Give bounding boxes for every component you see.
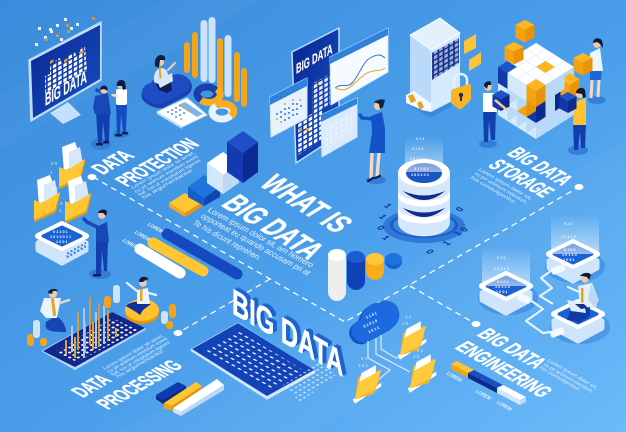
data processing text: fuit. Ius ut voluptatum ligeres <box>110 340 172 377</box>
legend bars with labels <box>121 223 237 274</box>
engineering labels: LOREM <box>474 390 492 401</box>
floating orange cubes <box>504 20 534 64</box>
legend bars with labels: LOREM <box>121 239 139 250</box>
server rack <box>405 18 464 118</box>
cloud seat with woman and laptop <box>141 55 192 108</box>
data tile: 1 0 0 1 <box>56 240 68 244</box>
small cylinders <box>27 285 176 346</box>
database cylinder <box>383 137 465 243</box>
server tiles with cables: 1 0 1 1 0 <box>562 253 577 257</box>
data tile <box>38 224 86 263</box>
folders: 0 1 <box>361 356 368 361</box>
cylinder chart <box>328 249 402 301</box>
big data 3d lettering: BIG DATA <box>234 279 345 384</box>
heading: big data engineering: BIG DATA <box>472 325 553 372</box>
engineering labels <box>445 372 513 412</box>
person: seated man with laptop <box>567 273 599 323</box>
engineering labels: LOREM <box>495 401 513 412</box>
folders with documents <box>34 142 91 223</box>
person: man placing cube <box>479 81 510 148</box>
heading: big data engineering: ENGINEERING <box>450 338 558 400</box>
connector end dots <box>88 174 584 336</box>
description text: Te his dicunt reprehen. <box>191 218 265 262</box>
storage text: his consulgentur. <box>469 176 518 205</box>
data tile: 1 0 1 0 0 1 1 <box>50 235 71 239</box>
cube stack <box>498 43 580 139</box>
padlock icon <box>451 74 471 110</box>
server tiles with cables: 1 0 0 1 <box>496 290 508 294</box>
cloud with binary: 0 1 0 1 0 <box>363 319 378 329</box>
server tiles with cables: 1 0 1 1 0 <box>561 235 576 239</box>
server tiles with cables <box>478 214 610 344</box>
folders with documents: 1 <box>59 208 62 213</box>
folders with documents: 0 0 <box>51 161 58 166</box>
database cylinder: 1 0 1 1 0 1 <box>410 157 428 161</box>
person: woman on orange disc <box>125 277 159 324</box>
folders <box>353 314 436 404</box>
storage heading: big data storage <box>483 144 579 200</box>
heading: data processing: DATA <box>66 371 117 400</box>
server tiles with cables: 0 1 0 <box>564 222 572 226</box>
storage text: Lorem ipsum dolor sit, <box>477 168 533 201</box>
heading: data processing <box>66 357 188 412</box>
yellow tiles <box>464 34 481 71</box>
person: man with folders <box>84 209 111 279</box>
heading: data protection: DATA <box>86 147 140 177</box>
data tile: 0 1 1 0 1 <box>53 230 68 234</box>
legend bars with labels: LOREM <box>146 223 164 234</box>
description text: Lorem ipsum dolor sit, am homero <box>206 205 317 269</box>
dashed connector lines <box>93 177 579 333</box>
heading: big data engineering <box>450 325 558 400</box>
step bars chart <box>169 131 258 217</box>
server tiles with cables: 0 1 0 1 <box>497 280 509 284</box>
person: kneeling man <box>40 289 69 332</box>
engineering text: his consulgentur. <box>538 366 582 392</box>
cloud with binary <box>349 301 399 344</box>
data processing text: cu pri animum interdum everti <box>106 337 170 374</box>
person: man in navy suit <box>91 86 111 150</box>
heading: data protection <box>86 135 204 189</box>
binary tablet <box>192 323 336 402</box>
cloud with binary: 1 1 0 1 <box>365 311 378 320</box>
data protection text: fuit. Ius ut voluptatum ligeres <box>137 158 203 197</box>
data protection text: his argumentantur. <box>141 168 196 200</box>
panel: big data dashboard: BIG DATA <box>296 40 333 77</box>
big data 3d lettering <box>232 278 347 385</box>
server tiles with cables: 1 0 1 1 0 <box>494 267 509 271</box>
monitor with big data histogram: BIG DATA <box>45 66 87 110</box>
folders: 0 1 <box>417 348 424 353</box>
binary digits around database: 0 <box>423 248 436 255</box>
binary digits around database: 1 0 <box>451 226 471 237</box>
engineering text: Lorem ipsum dolor sit, <box>546 359 599 390</box>
person: woman holding orange cube <box>574 38 606 104</box>
engineering text: cu pri animum interdum, <box>542 363 595 394</box>
engineering labels: LOREM <box>445 372 463 383</box>
description text: opporteat eu quando accusam pri at <box>199 211 313 277</box>
person: woman in blue dress <box>360 99 386 184</box>
folders: 1 0 1 <box>358 363 369 368</box>
binary digits around database <box>374 202 471 255</box>
database cylinder: 0 1 0 1 <box>412 147 424 151</box>
data protection text: cu pri animum interdum everti <box>133 155 200 194</box>
binary digits around database: 1 <box>381 202 394 209</box>
donut charts <box>197 87 234 119</box>
person: colleague in white shirt <box>111 80 129 138</box>
binary digits around database: 1 <box>376 213 389 220</box>
legend bars with labels: LOREM <box>133 231 151 242</box>
folders: 1 0 <box>402 321 409 326</box>
storage heading: big data storage: BIG DATA <box>502 144 579 189</box>
heading: data protection: PROTECTION <box>110 135 204 189</box>
data processing platform with bar chart <box>43 297 145 369</box>
storage heading: big data storage: STORAGE <box>483 156 560 200</box>
monitor with big data histogram <box>29 17 101 124</box>
server tiles with cables: 1 0 1 1 0 <box>495 285 510 289</box>
data processing text: Lorem ipsum dolor sit amet, <box>102 334 166 371</box>
big data 3d lettering: BIG DATA <box>232 280 343 385</box>
folders with documents: 0 <box>60 201 63 206</box>
data protection text: Lorem ipsum dolor sit amet, <box>130 151 197 190</box>
tablet with dot chart <box>157 98 207 129</box>
calendar window left <box>270 78 307 137</box>
server tiles with cables: 1 0 0 1 <box>563 258 575 262</box>
cloud with binary: 1 0 1 1 <box>368 326 380 334</box>
server tiles with cables: 0 1 0 1 <box>564 248 576 252</box>
heading: data processing: PROCESSING <box>91 357 188 412</box>
database cylinder: 0 1 1 <box>416 137 424 141</box>
title: what is big data: BIG DATA <box>214 190 333 264</box>
data processing text: his argumentantur. <box>115 349 166 379</box>
storage text: cu pri animum interdum, <box>473 172 529 205</box>
folders with documents: 1 <box>50 170 53 175</box>
binary digits around database: 0 <box>453 206 466 213</box>
database cylinder: 0 1 1 0 1 <box>414 167 429 171</box>
cylinder bar chart <box>184 17 247 107</box>
folders with documents: 1 0 <box>52 186 59 191</box>
cloud connections <box>368 335 410 380</box>
big data 3d lettering: BIG DATA <box>236 278 347 383</box>
engineering progress bar <box>451 361 526 405</box>
person: woman in yellow <box>559 88 588 155</box>
binary digits around database: 1 <box>440 240 453 247</box>
isometric bars <box>156 379 224 416</box>
server tiles with cables: 0 1 0 <box>497 256 505 260</box>
panel: big data dashboard <box>292 28 339 163</box>
folders: 1 1 <box>405 314 412 319</box>
binary digits around database: 0 <box>374 224 387 231</box>
line chart window <box>330 28 388 105</box>
binary digits around database: 1 <box>379 234 392 241</box>
database cylinder: 1 0 0 1 0 1 <box>411 173 429 177</box>
title: what is big data: WHAT IS <box>252 170 361 237</box>
calendar window right <box>321 98 357 157</box>
folders: 1 0 <box>413 354 420 359</box>
title: what is big data <box>214 170 361 264</box>
